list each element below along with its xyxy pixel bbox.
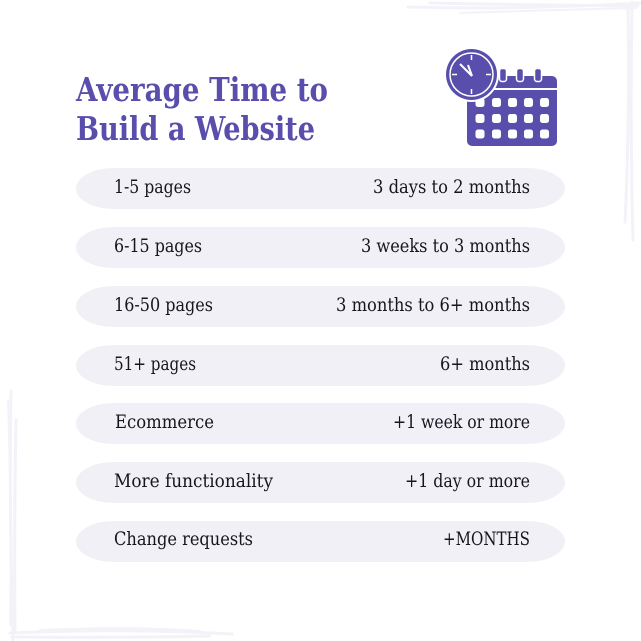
row: Ecommerce: +1 week or more	[393, 412, 530, 433]
row: 16-50 pages	[76, 286, 565, 327]
title: Build a Website	[76, 109, 315, 148]
row: 51+ pages: 6+ months	[440, 354, 530, 375]
row: 6-15 pages: 6-15 pages	[114, 236, 202, 257]
title: Average Time to	[75, 70, 328, 109]
row: Ecommerce: Ecommerce	[115, 412, 214, 433]
row: Change requests: Change requests	[114, 529, 253, 550]
icon: calendar with clock	[444, 47, 557, 146]
row: More functionality: +1 day or more	[405, 471, 530, 492]
row: 16-50 pages: 3 months to 6+ months	[336, 295, 530, 316]
row: More functionality	[76, 462, 565, 503]
row: Ecommerce	[76, 403, 565, 444]
title	[75, 70, 328, 148]
row: Change requests	[76, 521, 565, 562]
row: More functionality: More functionality	[114, 471, 273, 492]
row: 1-5 pages: 3 days to 2 months	[373, 177, 530, 198]
row: 1-5 pages	[76, 168, 565, 209]
row: Change requests: +MONTHS	[443, 529, 530, 550]
row: 1-5 pages: 1-5 pages	[114, 177, 191, 198]
row: 51+ pages	[76, 345, 565, 386]
row: 6-15 pages	[76, 227, 565, 268]
row: 51+ pages: 51+ pages	[114, 354, 196, 375]
row: 6-15 pages: 3 weeks to 3 months	[361, 236, 530, 257]
row: 16-50 pages: 16-50 pages	[114, 295, 213, 316]
